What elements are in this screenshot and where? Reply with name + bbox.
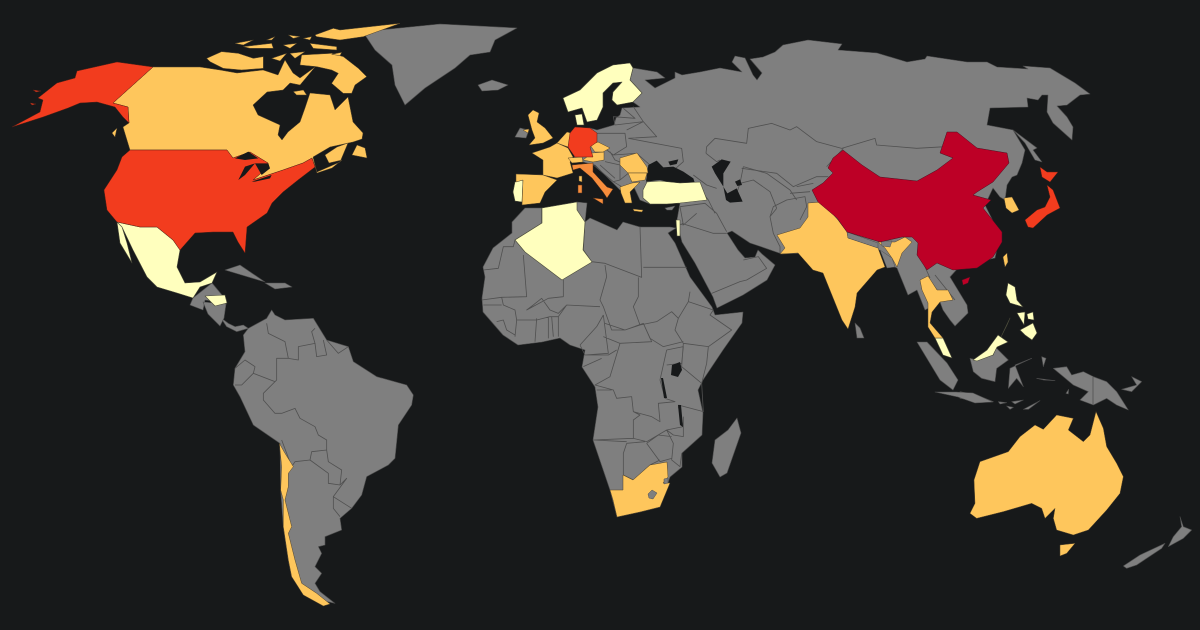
African lakes: [661, 362, 683, 427]
countries: low value (pale yellow): [117, 63, 1037, 361]
Great Lakes: [235, 152, 272, 182]
inland seas and lakes: [646, 159, 743, 203]
countries: very high value (red-orange): [12, 62, 1060, 253]
countries: medium value (gold): [112, 23, 1123, 606]
gray landmasses: [190, 24, 1192, 603]
countries: high value (orange): [572, 163, 613, 204]
gray country borders: [235, 107, 1093, 517]
Lesotho, Swaziland, Nepal, Bhutan, Bangladesh enclaves: [648, 232, 895, 499]
China (highest value): [812, 132, 1009, 285]
